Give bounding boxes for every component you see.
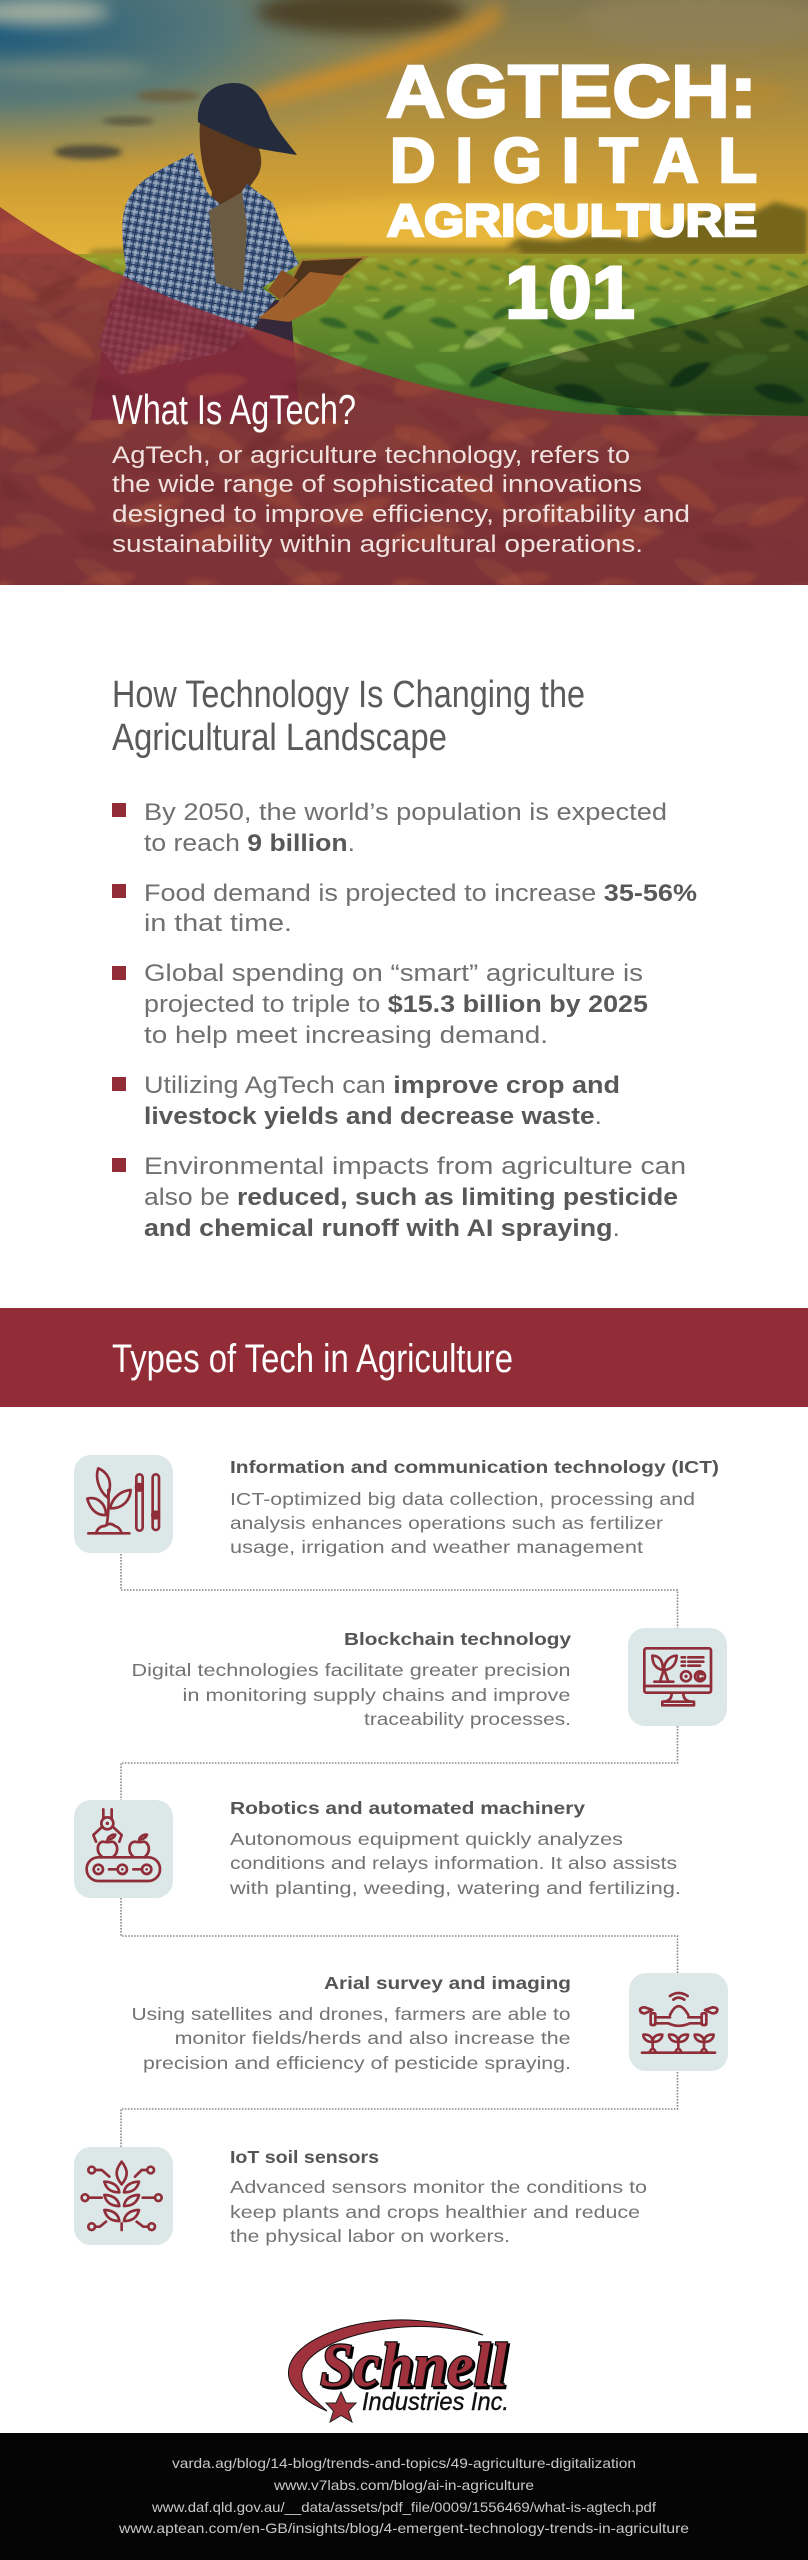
ICT description: analysis enhances operations such as fertilizer (230, 1513, 663, 1533)
bullet: utilizing agtech: livestock yields and decrease waste . (144, 1103, 602, 1130)
bullet: food demand (112, 880, 697, 937)
icon: plant and sliders (74, 1455, 173, 1553)
red curved overlay (0, 207, 808, 585)
icon: wheat with circuit nodes (74, 2147, 173, 2245)
bullet: global spending: Global spending on “smart” agriculture is (144, 960, 643, 987)
heading: how technology is changing: Agricultural Landscape (112, 717, 447, 759)
source links: www.aptean.com/en-GB/insights/blog/4-emergent-technology-trends-in-agriculture (118, 2520, 689, 2536)
iot description (230, 2177, 647, 2246)
robotics description: Autonomous equipment quickly analyzes (230, 1829, 623, 1849)
robotics description: conditions and relays information. It also assists (230, 1853, 677, 1873)
robotics description: with planting, weeding, watering and fertilizing. (229, 1878, 681, 1898)
icon: drone over sprouts (629, 1973, 728, 2071)
intro paragraph: designed to improve efficiency, profitability and (112, 501, 690, 528)
iot description: keep plants and crops healthier and reduce (230, 2202, 640, 2222)
treeline (90, 202, 808, 256)
item: robotics (74, 1798, 681, 1898)
iot description: the physical labor on workers. (230, 2226, 510, 2246)
blockchain description: Digital technologies facilitate greater precision (132, 1660, 570, 1680)
farmer pants (90, 300, 300, 420)
logo wordmark: Schnell (320, 2332, 508, 2400)
blockchain description: in monitoring supply chains and improve (182, 1685, 570, 1705)
heading: how technology is changing (112, 674, 585, 759)
heading: what is agtech: What Is AgTech? (112, 386, 356, 433)
arial survey heading: Arial survey and imaging (324, 1973, 571, 1993)
iot description: Advanced sensors monitor the conditions to (230, 2177, 647, 2197)
farmer plaid shirt (98, 153, 299, 375)
item: blockchain (132, 1628, 727, 1729)
sky (0, 0, 808, 262)
bullet: environmental impacts (112, 1153, 686, 1242)
intro paragraph: the wide range of sophisticated innovations (112, 471, 642, 498)
bullet: food demand: Food demand is projected to increase 35-56% (144, 880, 697, 907)
bullet: utilizing agtech: Utilizing AgTech can improve crop and (144, 1072, 620, 1099)
bullet: global spending: projected to triple to $15.3 billion by 2025 (144, 991, 648, 1018)
blockchain description (132, 1660, 571, 1729)
heading: how technology is changing: How Technology Is Changing the (112, 674, 585, 716)
source links: www.v7labs.com/blog/ai-in-agriculture (273, 2477, 534, 2493)
highlight leaves (462, 326, 590, 446)
band: types of tech (0, 1308, 808, 1407)
item: iot soil sensors (74, 2147, 647, 2246)
main title: 101 (505, 251, 635, 334)
logo subtitle: Industries Inc. (362, 2388, 509, 2416)
main title: DIGITAL (390, 126, 757, 196)
bullet: global spending: to help meet increasing demand. (144, 1022, 548, 1049)
farmer neck and face (200, 123, 262, 204)
ICT description: usage, irrigation and weather management (230, 1537, 643, 1557)
warm leaf texture on overlay (0, 207, 808, 585)
farmer t-shirt (209, 192, 247, 292)
main title: AGRICULTURE (387, 195, 757, 246)
logo swoosh (289, 2320, 483, 2411)
logo star (326, 2392, 356, 2422)
icon: robot arm and apples on conveyor (74, 1800, 173, 1898)
bullet: population: to reach 9 billion . (144, 830, 355, 857)
dotted connector path (121, 1554, 678, 2147)
source links: varda.ag/blog/14-blog/trends-and-topics/49-agriculture-digitalization (172, 2455, 636, 2471)
footer: sources (0, 2433, 808, 2560)
ICT description: ICT-optimized big data collection, processing and (230, 1489, 695, 1509)
blockchain heading: Blockchain technology (344, 1629, 571, 1649)
intro paragraph: AgTech, or agriculture technology, refers to (112, 442, 630, 469)
main title (386, 50, 757, 334)
bullet: population (112, 799, 667, 857)
ICT heading: Information and communication technology (ICT) (230, 1457, 719, 1477)
farmer hand (258, 272, 345, 322)
hero panel (0, 0, 808, 586)
bullet: environmental impacts: and chemical runoff with AI spraying . (144, 1215, 620, 1242)
bullet: population: By 2050, the world’s population is expected (144, 799, 667, 826)
intro paragraph (112, 442, 690, 558)
bullet: food demand: in that time. (144, 910, 292, 937)
bullet: global spending (112, 960, 648, 1049)
tablet (278, 257, 366, 305)
robotics description (229, 1829, 681, 1898)
logo: Schnell Industries Inc. (289, 2320, 509, 2422)
arial survey description: Using satellites and drones, farmers are able to (132, 2004, 570, 2024)
icon: monitor with plant (628, 1628, 727, 1726)
robotics heading: Robotics and automated machinery (230, 1798, 585, 1818)
bullet list (112, 799, 697, 1242)
source links (118, 2455, 689, 2536)
bullet: environmental impacts: Environmental impacts from agriculture can (144, 1153, 686, 1180)
bullet: environmental impacts: also be reduced, such as limiting pesticide (144, 1184, 678, 1211)
blockchain description: traceability processes. (364, 1709, 571, 1729)
field (0, 254, 808, 586)
dark field shade (490, 285, 808, 416)
farmer cap (198, 83, 297, 155)
farmer (90, 83, 366, 420)
iot heading: IoT soil sensors (230, 2147, 379, 2167)
arial survey description: monitor fields/herds and also increase the (175, 2028, 571, 2048)
arial survey description (132, 2004, 571, 2073)
bullet: utilizing agtech (112, 1072, 620, 1130)
item: arial survey (132, 1973, 728, 2073)
arial survey description: precision and efficiency of pesticide spraying. (143, 2053, 571, 2073)
intro paragraph: sustainability within agricultural operations. (112, 531, 643, 558)
item: ICT (74, 1455, 719, 1557)
band: types of tech: Types of Tech in Agriculture (112, 1337, 513, 1381)
main title: AGTECH: (386, 50, 757, 133)
ICT description (230, 1489, 695, 1557)
source links: www.daf.qld.gov.au/__data/assets/pdf_file/0009/1556469/what-is-agtech.pdf (151, 2499, 656, 2515)
